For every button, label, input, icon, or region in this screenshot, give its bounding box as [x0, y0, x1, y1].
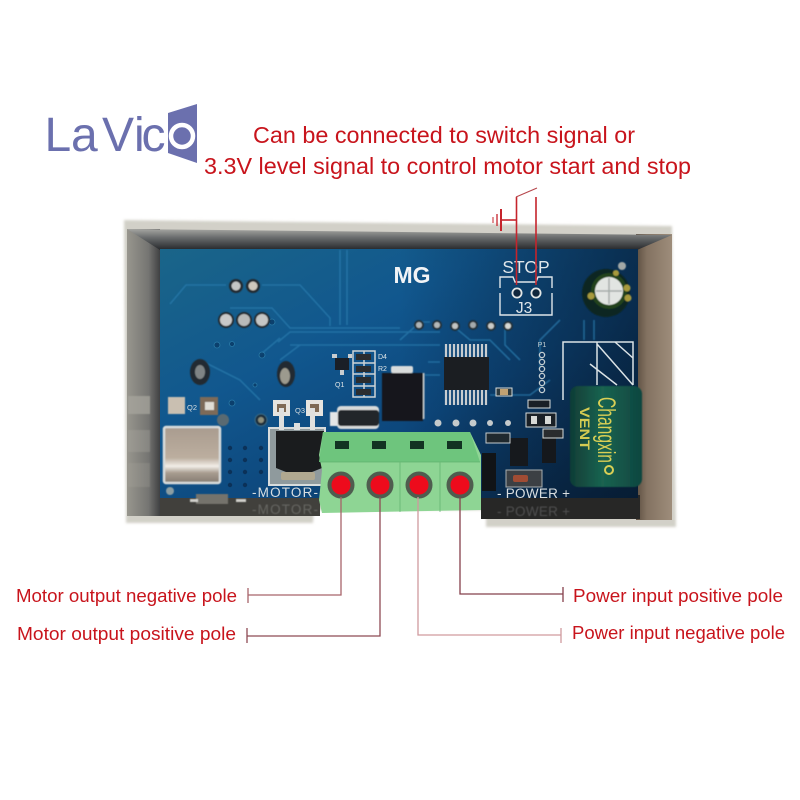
terminal dividers — [320, 462, 480, 512]
label P1: P1 — [538, 342, 546, 349]
case floor right — [481, 495, 640, 519]
label: motor positive: Motor output positive pole — [17, 624, 236, 644]
large silver pad — [164, 427, 220, 483]
terminal body — [319, 432, 481, 513]
resistor cluster Q1 D4 R2 — [332, 351, 387, 397]
label: power positive: Power input positive pole — [573, 586, 783, 606]
silkscreen box with diagonal stripes — [563, 342, 633, 400]
via grid near motor — [228, 446, 263, 487]
resistor cluster Q1 D4 R2: D4 — [378, 354, 387, 361]
chip with pins — [444, 344, 489, 405]
motor transistor: Q3 — [295, 406, 305, 415]
leader: motor positive — [247, 497, 380, 643]
terminal screw markers — [330, 474, 472, 496]
board shading — [400, 249, 638, 498]
leader: motor negative — [248, 497, 341, 603]
leader: power negative — [418, 497, 561, 643]
pin header P1 — [539, 352, 545, 393]
board label MOTOR: -MOTOR- — [252, 485, 318, 500]
label: power negative: Power input negative pole — [572, 623, 785, 643]
electrolytic capacitor Changxin — [570, 386, 642, 487]
solder joints above terminal — [434, 420, 511, 426]
reflection of POWER label: - POWER + — [497, 504, 570, 519]
label: motor negative: Motor output negative pole — [16, 586, 237, 606]
logo door icon with letter o — [168, 104, 197, 163]
connector J3 STOP: STOP — [502, 257, 550, 277]
resistor cluster Q1 D4 R2: Q1 — [335, 382, 344, 389]
case left wall — [127, 229, 160, 516]
solder joints upper middle — [414, 320, 513, 331]
component C8 — [496, 388, 512, 396]
board traces — [170, 250, 594, 400]
circuit board — [160, 249, 638, 498]
pads near Q2 — [168, 397, 229, 426]
electrolytic capacitor Changxin: Changxin — [592, 397, 620, 463]
reflection of MOTOR label: -MOTOR- — [252, 502, 318, 517]
case clip reflection — [190, 494, 246, 504]
electrolytic capacitor Changxin: VENT — [577, 407, 593, 451]
vias — [214, 319, 275, 406]
solder joints middle left — [190, 359, 295, 426]
case right wall — [636, 234, 672, 520]
green terminal block — [319, 432, 481, 513]
icon: switch wiring with ground — [493, 188, 537, 285]
large power transistor — [382, 366, 424, 421]
heading: switch signal note: Can be connected to switch signal or — [253, 122, 635, 148]
resistor cluster Q1 D4 R2: R2 — [378, 366, 387, 373]
logo: LaVico — [44, 104, 197, 163]
panel: controller board in its case — [124, 188, 676, 527]
heading: level signal note: 3.3V level signal to control motor start and stop — [204, 153, 691, 179]
terminal slots — [335, 441, 462, 449]
diode D1 — [330, 406, 379, 429]
board label MG: MG — [393, 262, 431, 288]
leader: power positive — [460, 497, 563, 602]
case floor left — [160, 495, 320, 516]
terminal upper band — [319, 432, 480, 462]
board label POWER: - POWER + — [497, 486, 570, 501]
connector J3 STOP — [500, 257, 552, 317]
motor transistor — [269, 400, 325, 485]
case top wall — [127, 229, 672, 250]
case left wall highlights — [128, 396, 150, 487]
logo wordmark: LaVic — [44, 109, 166, 162]
power section components — [482, 400, 563, 491]
connector J3 STOP: J3 — [516, 300, 532, 317]
case outer shell — [124, 220, 676, 527]
label Q2: Q2 — [187, 403, 197, 412]
solder joints upper left — [218, 279, 270, 328]
round pad bottom left — [166, 487, 174, 495]
small capacitor — [582, 262, 632, 317]
